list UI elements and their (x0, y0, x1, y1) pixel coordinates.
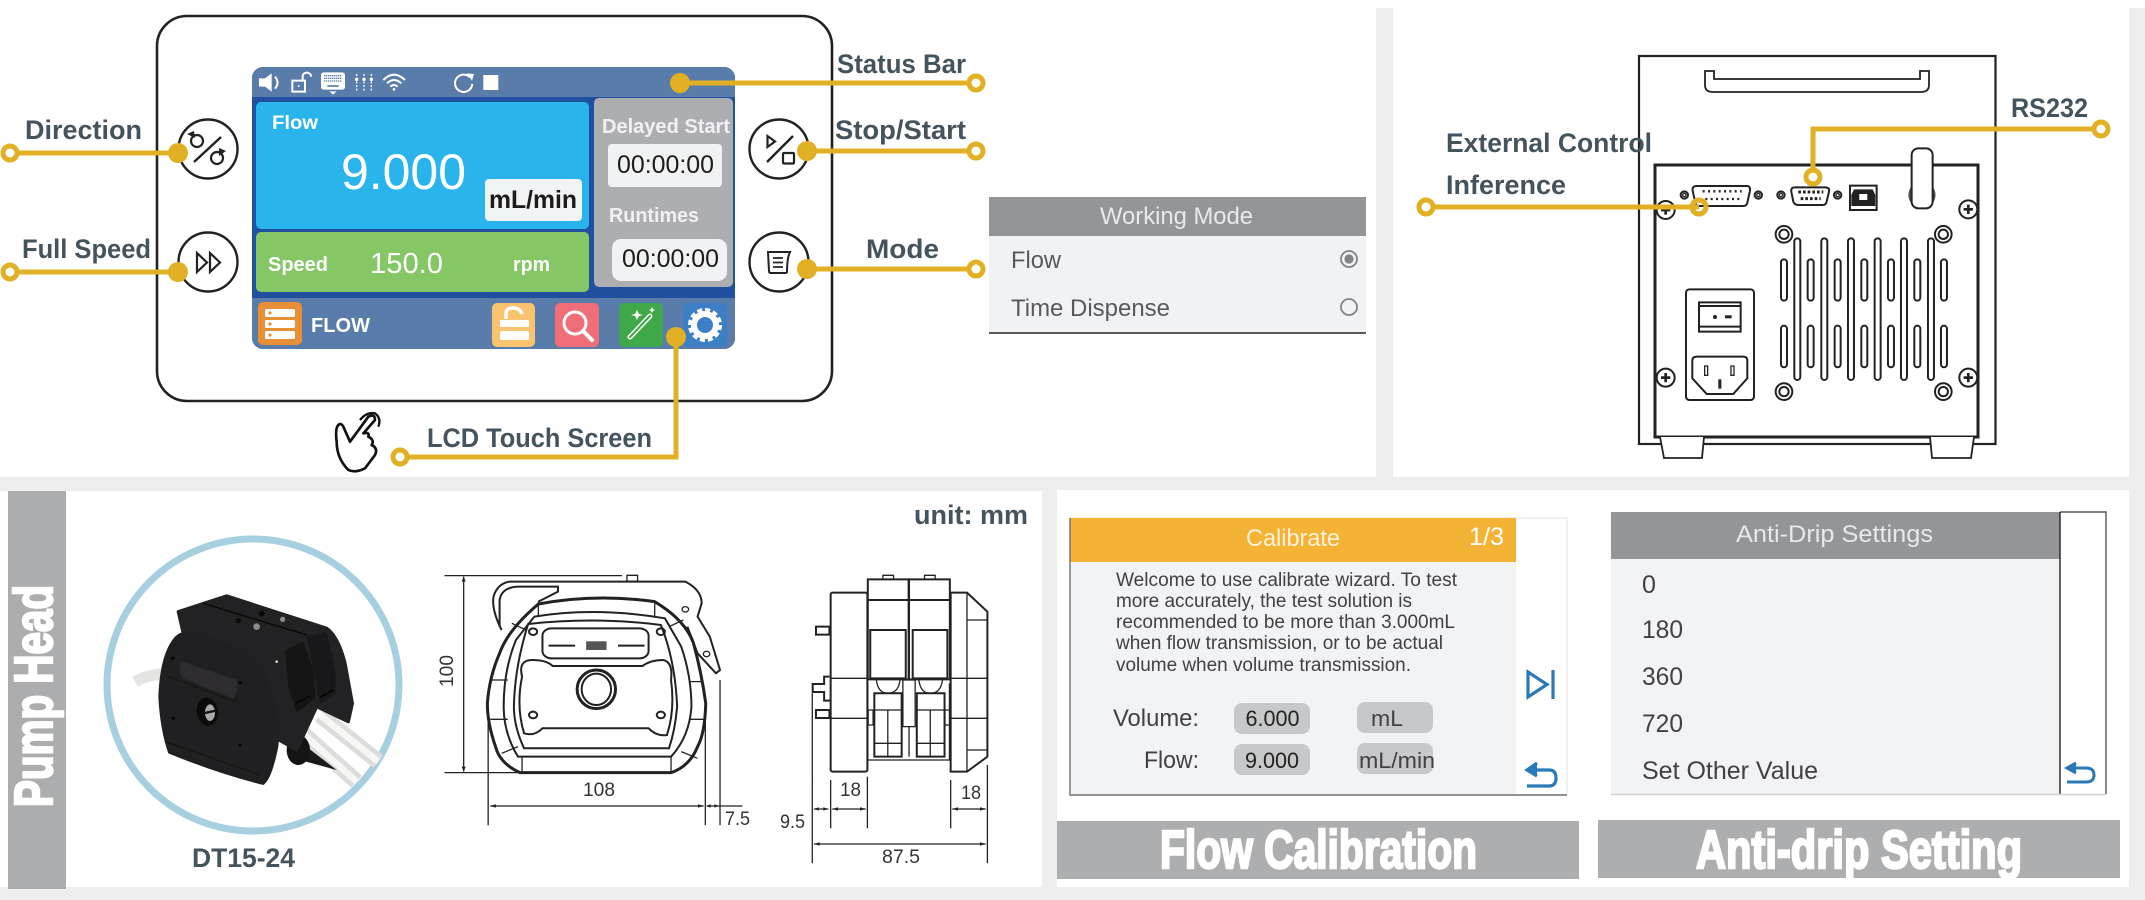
drawing: pump head side view (780, 575, 987, 868)
panel: front control panel (0, 0, 1376, 477)
speed readout: rpm (513, 254, 550, 276)
antenna (1909, 148, 1935, 208)
volume field: 6.000 (1246, 706, 1300, 731)
callout: stop/start (797, 115, 983, 161)
panel: working mode dialog: Time Dispense (1011, 295, 1170, 322)
speed readout: 150.0 (370, 248, 443, 280)
instruction text (1115, 570, 1458, 676)
button: direction (178, 120, 238, 178)
volume field (1113, 702, 1433, 734)
icon: back (1527, 763, 1556, 786)
status bar (252, 67, 735, 97)
panel: rear view (1393, 0, 2129, 477)
panel: calibration and anti-drip (1057, 490, 2129, 887)
radio: flow selected (1341, 251, 1357, 267)
callout: external control inference (1419, 128, 1706, 214)
callout: direction: Direction (25, 115, 142, 145)
icon: unlock (492, 303, 535, 347)
callout: RS232: RS232 (2011, 93, 2088, 123)
screen: calibrate wizard: 1/3 (1469, 523, 1504, 551)
touch screen: FLOW (311, 315, 370, 337)
drawing: pump head front view: 108 (583, 780, 615, 801)
bottom bar (252, 298, 735, 349)
panel: pump head (0, 491, 1042, 889)
outlet tubes (293, 715, 378, 782)
screen: calibrate wizard: Calibrate (1246, 525, 1340, 552)
timers: 00:00:00 (617, 151, 714, 179)
callout: external control inference: Inference (1446, 170, 1566, 200)
speed readout (256, 232, 589, 292)
flow field (1144, 743, 1435, 775)
timers: Delayed Start (602, 116, 730, 138)
volume field: mL (1371, 706, 1403, 731)
flow field: 9.000 (1245, 748, 1299, 773)
volume field: Volume: (1113, 705, 1199, 732)
drawing: pump head side view: 18 (961, 783, 981, 804)
panel: working mode dialog (989, 197, 1366, 334)
flow field: mL/min (1359, 748, 1435, 773)
setting options: 720 (1642, 710, 1683, 738)
setting options: Set Other Value (1642, 757, 1818, 785)
setting options (1642, 571, 1818, 785)
timers: 00:00:00 (622, 245, 719, 273)
front plate (158, 632, 279, 785)
drawing: pump head side view: 18 (840, 780, 861, 801)
drawing: pump head front view: 100 (437, 655, 458, 687)
rear tube (135, 674, 163, 682)
touch screen (252, 67, 735, 349)
screen: calibrate wizard (1070, 518, 1567, 795)
icon: search (555, 303, 599, 347)
button: full speed (178, 232, 238, 292)
flow readout: Flow (272, 113, 318, 134)
connector: external control (1681, 186, 1762, 206)
callout: LCD touch screen: LCD Touch Screen (427, 423, 652, 453)
instruction text: recommended to be more than 3.000mL (1116, 612, 1455, 633)
panel: working mode dialog: Flow (1011, 247, 1062, 274)
icon: flow menu (258, 302, 302, 345)
drawing: pump head side view: 87.5 (882, 847, 920, 868)
flow readout (256, 102, 589, 229)
button: mode (750, 232, 808, 292)
rear connectors and vents (1657, 148, 1977, 400)
setting options: 0 (1642, 571, 1656, 599)
callout: full speed: Full Speed (22, 234, 151, 264)
status icons (259, 72, 498, 95)
icon: next (1528, 670, 1553, 699)
connector: RS232 (1777, 187, 1841, 205)
screen: anti-drip settings (1611, 512, 2106, 794)
speed readout: Speed (268, 254, 328, 276)
callout: status bar (670, 49, 983, 93)
instruction text: Welcome to use calibrate wizard. To test (1116, 570, 1458, 591)
callout: stop/start: Stop/Start (835, 115, 966, 145)
instruction text: more accurately, the test solution is (1116, 591, 1412, 612)
callout: direction (3, 115, 188, 163)
tube clips (285, 642, 316, 712)
flow field: Flow: (1144, 747, 1199, 774)
pump housing (178, 596, 352, 750)
timers (594, 98, 733, 287)
setting options: 360 (1642, 663, 1683, 691)
icon: wand (619, 303, 663, 347)
callout: mode (797, 234, 983, 279)
screen: anti-drip settings: Anti-Drip Settings (1736, 521, 1933, 548)
instruction text: volume when volume transmission. (1116, 655, 1411, 676)
flow readout: mL/min (489, 186, 577, 214)
callout: mode: Mode (866, 234, 939, 264)
device outline (157, 16, 832, 401)
callout: RS232 (1806, 93, 2108, 184)
timers: Runtimes (609, 205, 699, 227)
drawing: pump head front view: 7.5 (725, 809, 750, 830)
sidebar: pump head title: Pump Head (4, 585, 64, 807)
callout: external control inference: External Control (1446, 128, 1652, 158)
panel: working mode dialog: Working Mode (1100, 203, 1253, 230)
flow readout: 9.000 (341, 144, 466, 200)
connector: USB (1850, 186, 1877, 210)
photo: pump head in circle (107, 539, 399, 831)
callout: LCD touch screen (393, 327, 686, 464)
radio: time dispense (1341, 299, 1357, 315)
power switch and socket (1686, 289, 1754, 400)
icon: settings gear (683, 303, 727, 347)
instruction text: when flow transmission, or to be actual (1115, 633, 1443, 654)
screws (1657, 200, 1977, 400)
icon: touch hand (336, 413, 379, 471)
unit label: unit: mm (914, 500, 1028, 530)
drawing: pump head front view (437, 575, 750, 830)
drawing: pump head side view: 9.5 (780, 812, 805, 833)
banner: anti-drip setting: Anti-drip Setting (1696, 820, 2022, 880)
vent slots (1781, 238, 1947, 380)
callout: status bar: Status Bar (837, 49, 966, 79)
rear housing outline (1639, 56, 1996, 458)
callout: full speed (3, 234, 188, 282)
setting options: 180 (1642, 616, 1683, 644)
button: stop/start (750, 120, 808, 178)
banner: flow calibration: Flow Calibration (1160, 820, 1477, 880)
model label: DT15-24 (192, 843, 295, 873)
icon: back (2067, 763, 2094, 782)
